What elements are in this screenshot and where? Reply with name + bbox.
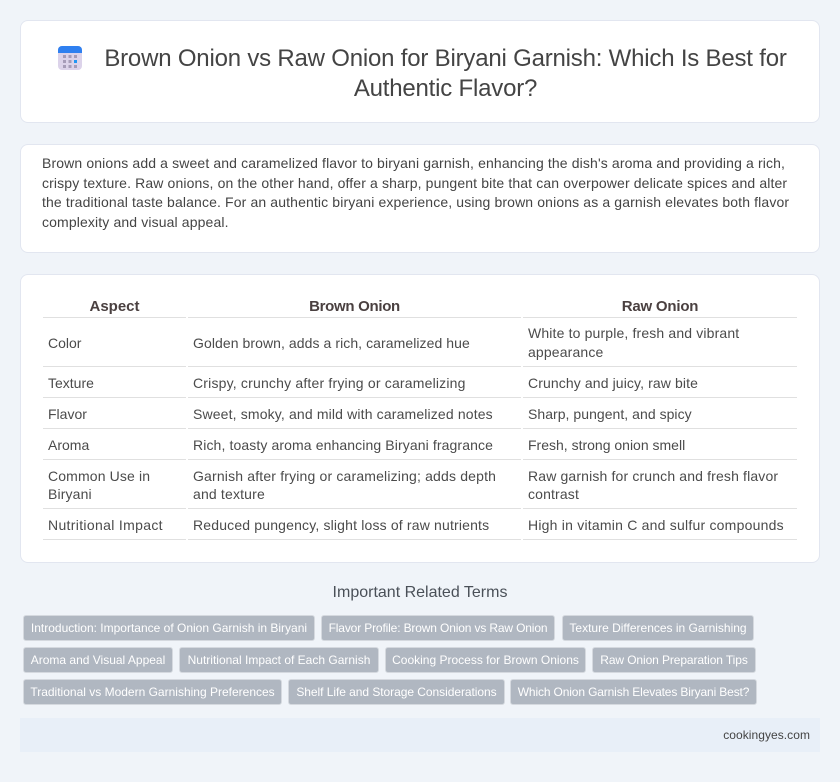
intro paragraph: complexity and visual appeal.	[42, 214, 229, 230]
row: texture	[48, 375, 698, 391]
related terms tags: Introduction: Importance of Onion Garnish in Biryani	[31, 621, 307, 635]
row: aroma	[48, 437, 685, 453]
footer	[20, 718, 820, 752]
row: color: appearance	[528, 344, 603, 360]
row: common use: Garnish after frying or caramelizing; adds depth	[193, 468, 496, 484]
column headers: Aspect	[89, 298, 140, 315]
related terms tags: Nutritional Impact of Each Garnish	[188, 653, 370, 667]
comparison table	[43, 298, 797, 540]
related terms tags: Texture Differences in Garnishing	[569, 621, 747, 635]
row: nutritional impact: High in vitamin C and sulfur compounds	[528, 517, 784, 533]
intro paragraph: crispy texture. Raw onions, on the other hand, offer a sharp, pungent bite that can overpower delicate spices and alter	[42, 174, 787, 190]
row: flavor: Flavor	[48, 406, 87, 422]
row: common use	[48, 468, 778, 502]
column headers: Brown Onion	[309, 298, 400, 315]
related terms tags: Aroma and Visual Appeal	[31, 653, 165, 667]
row: color: Color	[48, 335, 81, 351]
column headers	[89, 298, 698, 315]
row: nutritional impact: Nutritional Impact	[48, 517, 163, 533]
panel: introduction card	[20, 144, 820, 253]
title: Brown Onion vs Raw Onion for Biryani Garnish: Which Is Best for	[104, 45, 787, 72]
intro paragraph: Brown onions add a sweet and caramelized flavor to biryani garnish, enhancing the dish's aroma and providing a rich,	[42, 155, 785, 171]
title	[104, 45, 787, 102]
row: flavor: Sharp, pungent, and spicy	[528, 406, 692, 422]
column headers: Raw Onion	[622, 298, 698, 315]
row: flavor	[48, 406, 692, 422]
row: color: Golden brown, adds a rich, caramelized hue	[193, 335, 470, 351]
row: common use: Biryani	[48, 486, 92, 502]
related terms tags: Cooking Process for Brown Onions	[392, 653, 579, 667]
row: common use: Common Use in	[48, 468, 150, 484]
related terms tags: Raw Onion Preparation Tips	[600, 653, 748, 667]
icon: calendar	[58, 46, 82, 70]
row: nutritional impact: Reduced pungency, slight loss of raw nutrients	[193, 517, 489, 533]
related terms tags: Flavor Profile: Brown Onion vs Raw Onion	[329, 621, 547, 635]
related terms tags: Which Onion Garnish Elevates Biryani Best?	[518, 685, 749, 699]
panel: title card	[20, 20, 820, 123]
source credit: cookingyes.com	[723, 728, 810, 742]
title: Authentic Flavor?	[354, 75, 537, 102]
row: common use: contrast	[528, 486, 579, 502]
row: common use: Raw garnish for crunch and fresh flavor	[528, 468, 778, 484]
related terms tags: Traditional vs Modern Garnishing Preferences	[30, 685, 275, 699]
row: color	[48, 325, 740, 360]
row: texture: Texture	[48, 375, 94, 391]
intro paragraph	[42, 155, 789, 230]
row: texture: Crispy, crunchy after frying or caramelizing	[193, 375, 466, 391]
row: common use: and texture	[193, 486, 265, 502]
row: texture: Crunchy and juicy, raw bite	[528, 375, 698, 391]
row: aroma: Rich, toasty aroma enhancing Biryani fragrance	[193, 437, 493, 453]
panel: comparison table card	[20, 274, 820, 563]
related terms tags	[23, 615, 757, 705]
row: aroma: Aroma	[48, 437, 89, 453]
intro paragraph: the traditional taste balance. For an authentic biryani experience, using brown onions as a garnish elevates both flavor	[42, 194, 789, 210]
row: color: White to purple, fresh and vibrant	[528, 325, 739, 341]
row: nutritional impact	[48, 517, 784, 533]
row: flavor: Sweet, smoky, and mild with caramelized notes	[193, 406, 493, 422]
related terms heading: Important Related Terms	[333, 584, 507, 601]
related terms tags: Shelf Life and Storage Considerations	[296, 685, 497, 699]
row: aroma: Fresh, strong onion smell	[528, 437, 685, 453]
